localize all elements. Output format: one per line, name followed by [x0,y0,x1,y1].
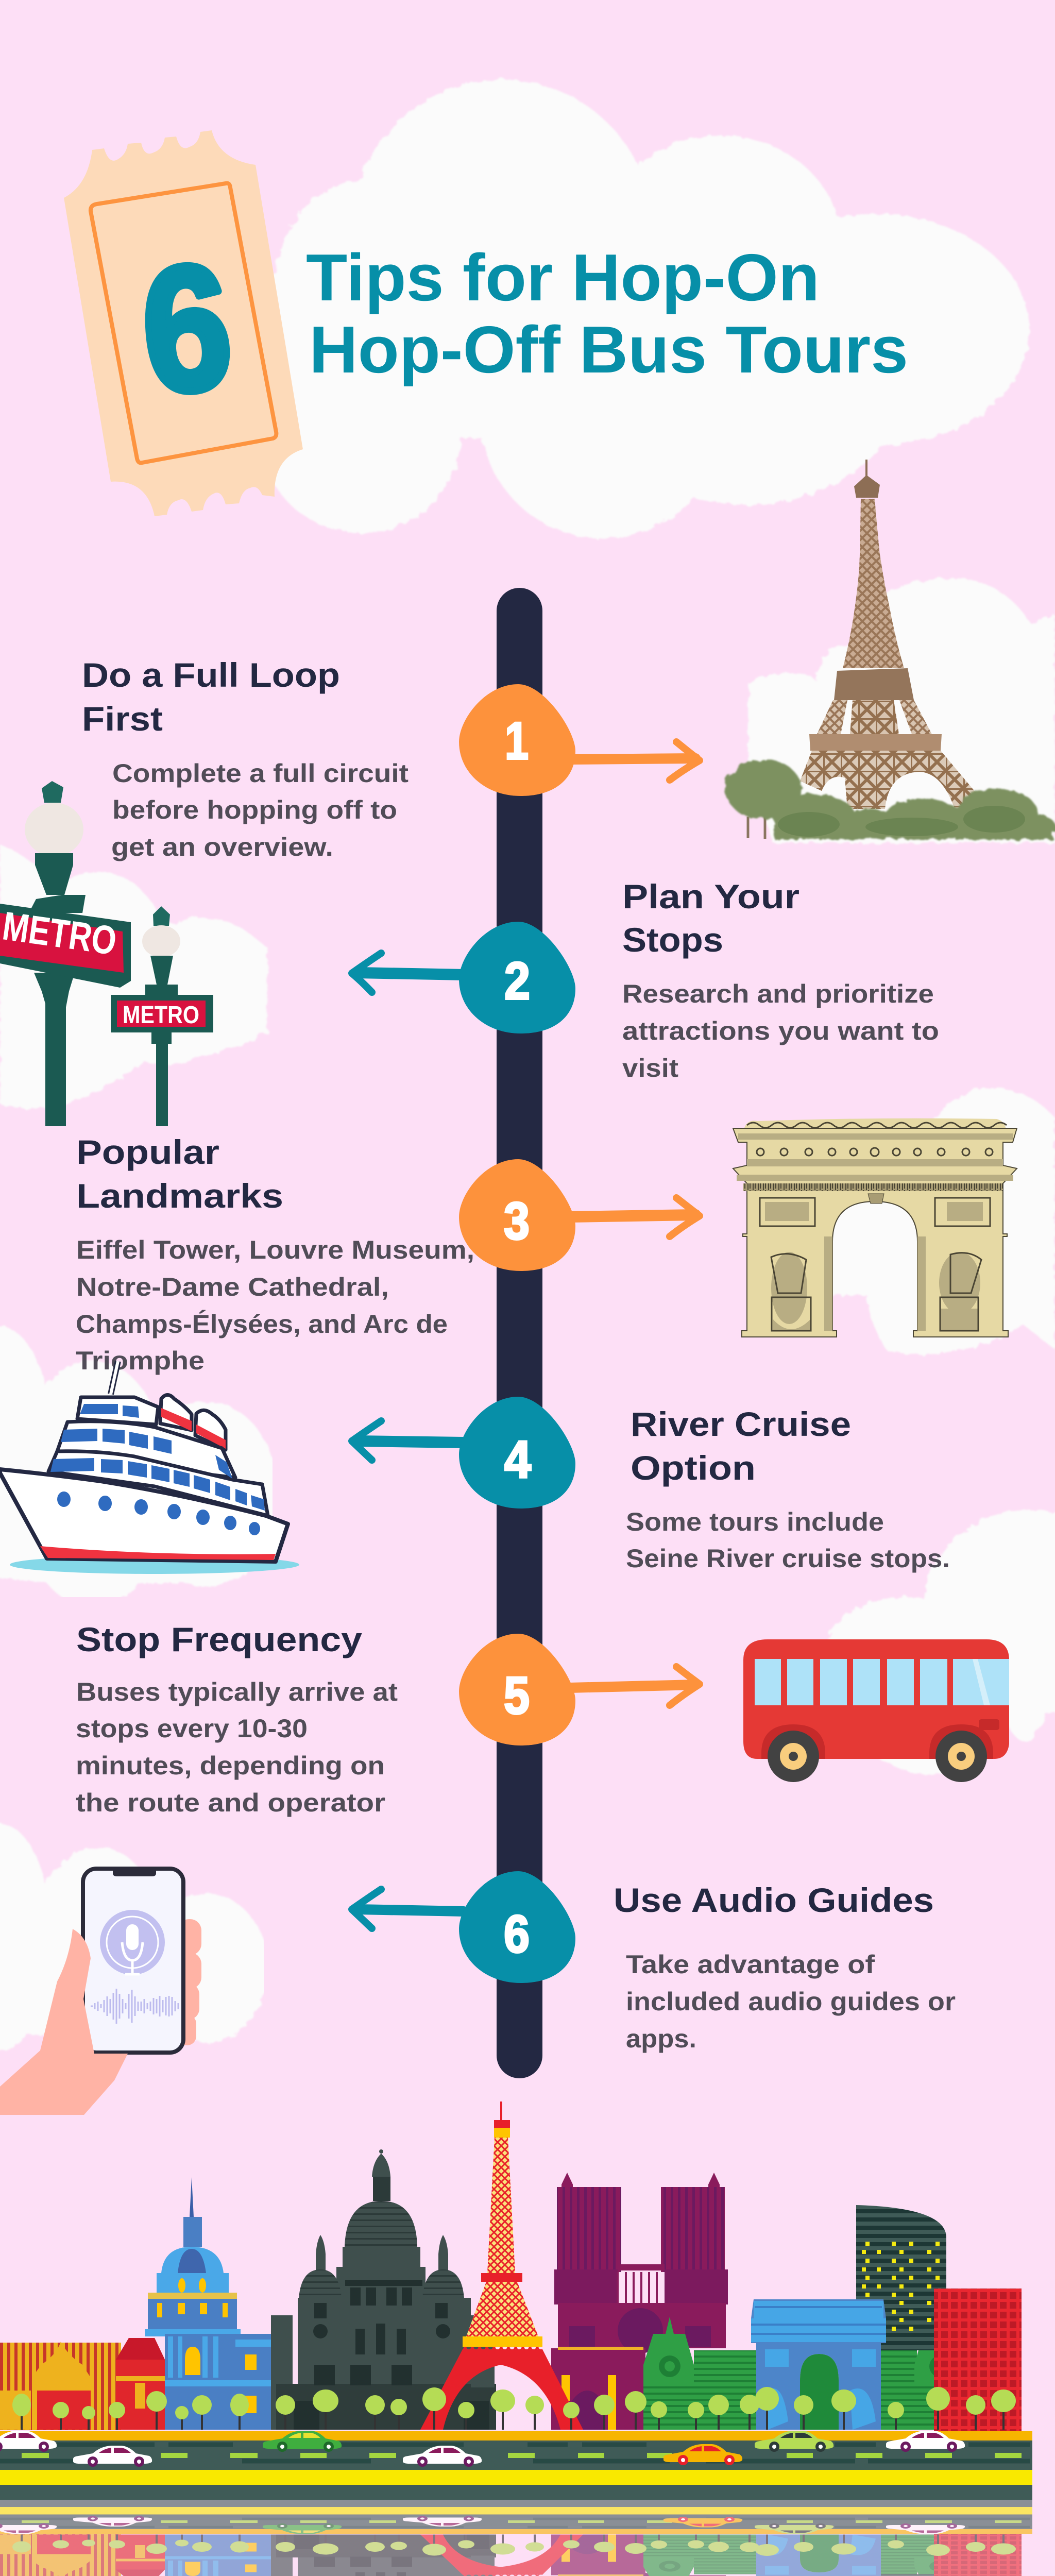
tip 4 text: Seine River cruise stops. [626,1544,950,1573]
road [0,2431,1032,2500]
tip 3 text: Champs-Élysées, and Arc de [76,1310,448,1338]
cloud: bus [824,1510,1055,1774]
node 3 [459,1159,575,1271]
cloud: Eiffel [748,579,1055,843]
cloud: metro [0,845,267,1110]
dark skyscraper [856,2205,946,2350]
node 2: 2 [504,952,530,1010]
node 5 [459,1634,575,1745]
node 6: 6 [504,1905,530,1963]
node 1: 1 [505,711,529,770]
node 2 [459,922,575,1033]
illustration: cruise ship [0,1361,299,1574]
tip 2 text: visit [622,1054,678,1082]
title: Hop-Off Bus Tours [309,313,908,387]
cloud: title [260,79,1029,538]
tip 3 text: Popular [76,1133,219,1171]
ticket badge [64,130,303,516]
illustration: red bus [743,1639,1009,1782]
node 4: 4 [504,1430,531,1489]
tip 3 text: Triomphe [76,1346,205,1375]
tip 1 text [82,656,409,861]
arrow 4 [352,1421,464,1460]
illustration: big metro sign: METRO [0,903,120,963]
tip 6 text: apps. [626,2024,696,2053]
tip 6 text [614,1881,956,2053]
illustration: triumphal arch [733,1118,1017,1337]
tip 3 text [76,1133,474,1375]
title: Tips for Hop-On [306,241,820,315]
tip 2 text: Research and prioritize [622,979,934,1008]
tip 5 text [76,1620,398,1817]
illustration: phone in hand [0,1867,201,2115]
node 3: 3 [504,1192,530,1250]
tip 5 text: Stop Frequency [76,1620,362,1658]
blue arch [751,2299,886,2430]
cloud: arch [824,1088,1055,1354]
tip 2 text [622,877,939,1082]
notre dame [551,2173,728,2430]
tip 1 text: get an overview. [111,833,333,861]
trees [12,2387,1016,2430]
red tower block [934,2289,1022,2431]
node 1 [459,684,575,796]
Sacre Coeur [271,2149,496,2430]
colorful Eiffel Tower [420,2102,583,2430]
tip 6 text: included audio guides or [626,1987,956,2016]
node 4 [459,1397,575,1509]
illustration: small metro sign: METRO [123,1002,199,1029]
tip 1 text: Do a Full Loop [82,656,340,694]
illustration: Eiffel Tower with trees [725,460,1055,840]
illustration: big metro sign [0,781,131,1126]
arrow 2 [352,953,464,992]
tip 4 text: River Cruise [631,1405,851,1443]
blue dome [145,2177,278,2430]
tip 5 text: stops every 10-30 [76,1714,308,1743]
tip 2 text: Plan Your [622,877,799,916]
tip 2 text: Stops [622,921,723,959]
cars [0,2431,965,2467]
arrow 1 [572,742,700,780]
cloud: phone [0,1824,268,2050]
tip 1 text: First [82,700,163,738]
tip 5 text: Buses typically arrive at [76,1677,398,1706]
node 6 [459,1871,575,1983]
illustration: small metro sign [111,906,213,1126]
arrow 5 [569,1667,700,1705]
tip 1 text: before hopping off to [112,795,397,824]
cloud: ship [0,1327,278,1607]
illustration: Paris skyline scene [0,2102,1032,2500]
tip 4 text: Some tours include [626,1507,884,1536]
skyline reflection [0,2500,1032,2576]
green station [643,2317,968,2430]
tip 4 text [626,1405,950,1573]
tip 3 text: Eiffel Tower, Louvre Museum, [76,1235,474,1264]
left palace [0,2338,165,2430]
tip 5 text: minutes, depending on [76,1751,385,1780]
tip 3 text: Notre-Dame Cathedral, [76,1273,389,1301]
tip 3 text: Landmarks [76,1177,283,1215]
timeline bar [497,588,542,2078]
arrow 6 [352,1889,464,1928]
node 5: 5 [504,1666,530,1725]
big number six: 6 [134,226,239,432]
tip 4 text: Option [631,1449,756,1487]
tip 2 text: attractions you want to [622,1016,939,1045]
tip 6 text: Take advantage of [626,1950,875,1979]
arrow 3 [569,1198,700,1236]
tip 1 text: Complete a full circuit [112,759,409,788]
title [306,241,908,387]
tip 6 text: Use Audio Guides [614,1881,934,1919]
tip 5 text: the route and operator [76,1788,385,1817]
